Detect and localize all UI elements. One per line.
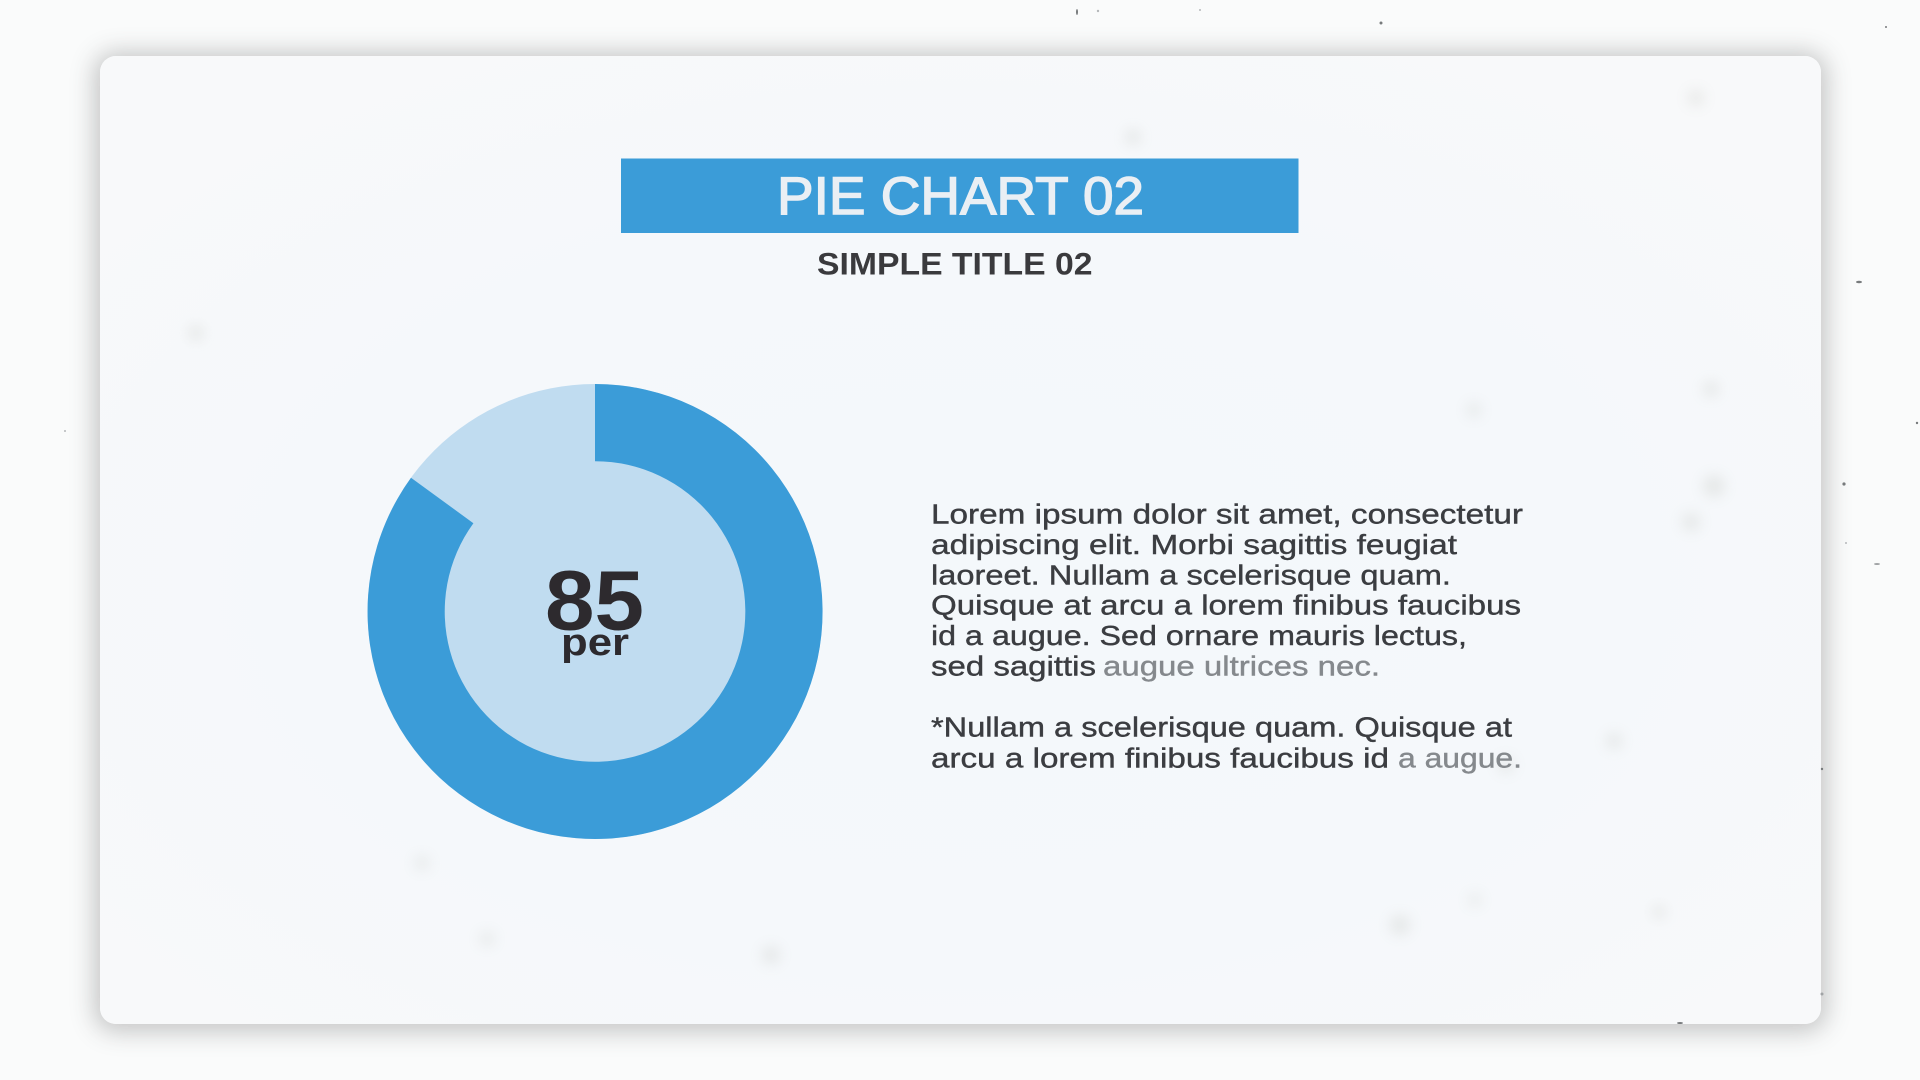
footnote paragraph: arcu a lorem finibus faucibus id — [931, 742, 1389, 773]
center value: 85 — [545, 554, 644, 648]
donut chart: 85 per — [368, 384, 823, 839]
footnote paragraph: *Nullam a scelerisque quam. Quisque at — [931, 712, 1512, 743]
main paragraph: augue ultrices nec. — [1103, 650, 1380, 681]
title text: PIE CHART 02 — [777, 167, 1144, 226]
85 percent ring segment — [368, 384, 823, 839]
main paragraph: adipiscing elit. Morbi sagittis feugiat — [931, 529, 1457, 560]
main paragraph: Quisque at arcu a lorem finibus faucibus — [931, 590, 1521, 621]
center unit: per — [561, 622, 629, 664]
main paragraph — [931, 498, 1523, 681]
footnote paragraph — [931, 712, 1522, 773]
remaining share and inner disc — [368, 384, 822, 839]
footnote paragraph: a augue. — [1398, 742, 1522, 773]
main paragraph: id a augue. Sed ornare mauris lectus, — [931, 620, 1467, 651]
main paragraph: sed sagittis — [931, 650, 1096, 681]
main paragraph: laoreet. Nullam a scelerisque quam. — [931, 559, 1451, 590]
main paragraph: Lorem ipsum dolor sit amet, consectetur — [931, 498, 1523, 529]
title banner — [621, 158, 1298, 233]
subtitle: SIMPLE TITLE 02 — [817, 246, 1092, 282]
